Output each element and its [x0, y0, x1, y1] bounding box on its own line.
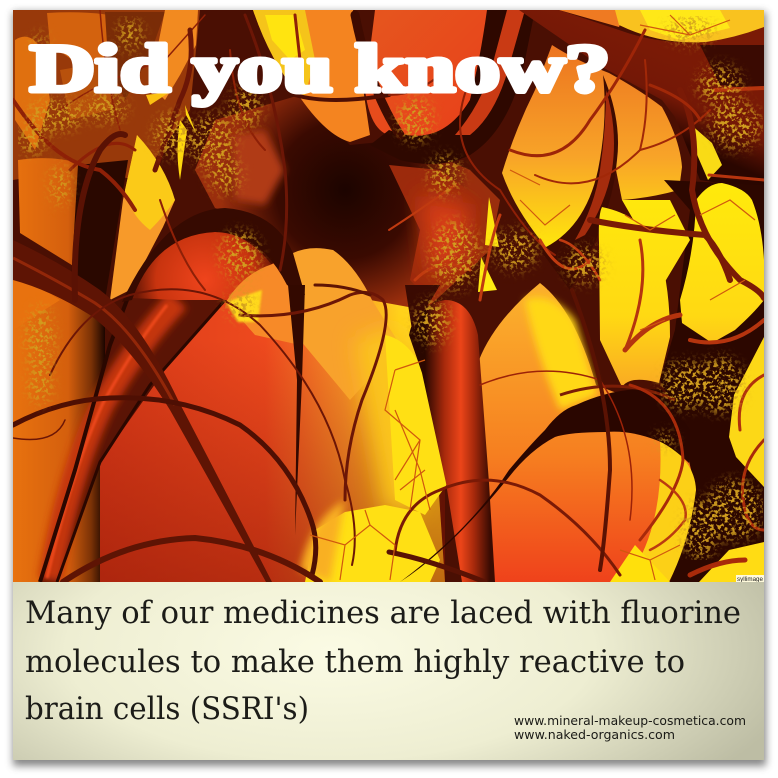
- upper right dark band: [519, 10, 764, 190]
- left yellow cluster: [355, 325, 420, 510]
- central trunk: [409, 300, 495, 582]
- upper thin branches: [13, 10, 764, 350]
- dark band over lower field: [400, 389, 690, 582]
- title: Did you know?: [30, 30, 610, 106]
- dome inner orange: [226, 264, 294, 344]
- watermark: [736, 575, 764, 582]
- spike: [288, 285, 305, 535]
- watermark: syllimage: [737, 577, 764, 583]
- red circle region: [365, 10, 490, 138]
- yellow network lines: [310, 15, 755, 580]
- lower arc branches: [13, 289, 764, 582]
- website links: www.mineral-makeup-cosmetica.com: [514, 713, 746, 728]
- upper right orange strip: [559, 10, 625, 27]
- image base: [13, 10, 764, 582]
- right yellow blob: [680, 183, 764, 343]
- caption background: [13, 582, 764, 760]
- caption text: brain cells (SSRI's): [25, 691, 309, 727]
- fractal neuron image panel: [13, 10, 764, 583]
- upper yellow blob: [253, 10, 315, 95]
- caption text: [25, 595, 741, 727]
- left brown and orange regions: [13, 10, 200, 582]
- tapered diagonal branch: [13, 240, 272, 582]
- lower right yellow blobs: [729, 337, 764, 487]
- centre right orange blob: [502, 45, 610, 247]
- yellow slivers: [146, 92, 499, 292]
- lower orange field: [479, 283, 696, 582]
- upper right yellow blob: [615, 10, 764, 42]
- gold fractal clusters: [18, 16, 763, 560]
- left trunk: [40, 292, 232, 582]
- caption text: Many of our medicines are laced with fluorine: [25, 595, 741, 631]
- yellow glow right of lower field: [642, 442, 696, 582]
- dome arc: [122, 208, 305, 302]
- upper centre orange blob: [253, 10, 370, 142]
- website links: [514, 713, 746, 742]
- caption panel: [13, 582, 764, 760]
- orange wedge: [110, 135, 175, 300]
- yellow wedge: [125, 135, 175, 230]
- dark dividing stem: [540, 75, 618, 290]
- central red and orange field: [100, 250, 445, 582]
- right dark field: [660, 180, 764, 582]
- dome interior: [133, 232, 271, 300]
- website links: www.naked-organics.com: [514, 727, 675, 742]
- orange blob under body: [293, 248, 400, 400]
- central dark body: [195, 95, 500, 310]
- caption text: molecules to make them highly reactive to: [25, 644, 685, 680]
- mid yellow blob: [599, 207, 670, 387]
